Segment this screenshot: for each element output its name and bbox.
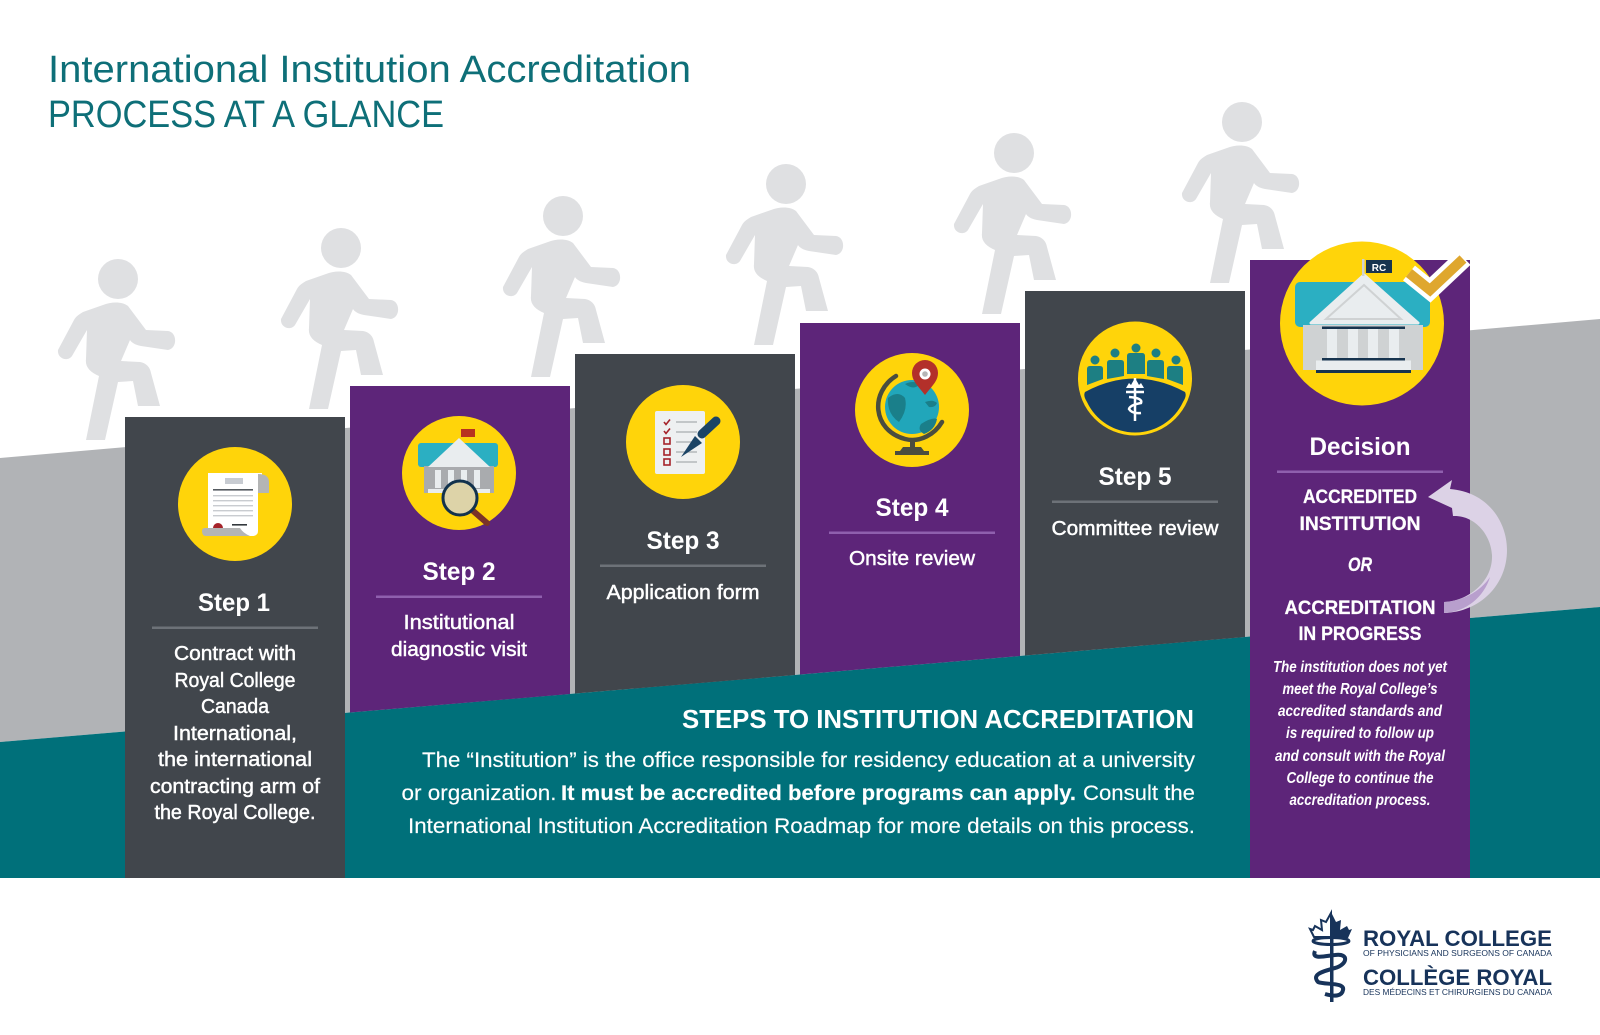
icon: committee with caduceus (1078, 322, 1192, 436)
text: step 1 description: International, (173, 723, 297, 745)
icon: accredited institution building with check mark: RC (1372, 263, 1386, 274)
person 3 (503, 196, 620, 377)
text: accreditation in progress note: accreditation process. (1290, 792, 1430, 809)
heading: decision: Decision (1310, 433, 1410, 461)
text: step 2 description (391, 612, 527, 661)
text: decision outcomes: OR (1348, 555, 1372, 576)
logo: Royal College: OF PHYSICIANS AND SURGEONS OF CANADA (1363, 949, 1553, 958)
arrow: in progress back to accredited (1428, 480, 1507, 613)
text: explanation paragraph: or organization. (402, 781, 556, 805)
icon: checklist and pen (626, 385, 740, 499)
person 1 (58, 259, 175, 440)
heading: step 3: Step 3 (646, 527, 720, 555)
title (48, 49, 691, 136)
text: explanation paragraph: It must be accredited before programs can apply. (561, 781, 1076, 805)
panel: step 4 (800, 323, 1020, 674)
text: decision outcomes: IN PROGRESS (1298, 624, 1422, 645)
panel: step 2 (350, 386, 570, 712)
heading: step 4: Step 4 (876, 494, 949, 522)
text: decision outcomes: ACCREDITED (1303, 487, 1417, 508)
person 2 (281, 228, 398, 409)
person 4 (726, 164, 843, 345)
text: accreditation in progress note: is required to follow up (1286, 725, 1434, 742)
text: step 1 description: the Royal College. (154, 802, 316, 824)
text: explanation paragraph: Consult the (1083, 781, 1195, 805)
title: PROCESS AT A GLANCE (48, 94, 444, 136)
logo: Royal College: COLLÈGE ROYAL (1363, 965, 1552, 990)
text: decision outcomes (1284, 487, 1436, 645)
background band: teal slope (0, 607, 1600, 878)
walking people climbing the steps (58, 102, 1299, 440)
person 5 (954, 133, 1071, 314)
text: accreditation in progress note: meet the Royal College’s (1282, 681, 1438, 698)
panel: step 3 (575, 354, 795, 694)
text: step 5 description: Committee review (1052, 518, 1219, 540)
icon: accredited institution building with check mark (1280, 242, 1464, 406)
heading: step 2: Step 2 (422, 558, 496, 586)
icon: contract scroll (178, 447, 292, 561)
text: step 2 description: diagnostic visit (391, 639, 527, 661)
text: explanation paragraph: International Institution Accreditation Roadmap for more details on this process. (408, 814, 1195, 838)
text: step 1 description: contracting arm of (150, 776, 320, 798)
text: step 1 description: Contract with (174, 643, 296, 665)
text: step 2 description: Institutional (404, 612, 514, 634)
logo: Royal College: DES MÉDECINS ET CHIRURGIENS DU CANADA (1363, 988, 1553, 997)
text: decision outcomes: ACCREDITATION (1284, 598, 1436, 619)
title: International Institution Accreditation (48, 49, 691, 91)
panel: step 1 (125, 417, 345, 878)
heading: step 5: Step 5 (1098, 463, 1172, 491)
logo: Royal College: ROYAL COLLEGE (1363, 926, 1552, 951)
text: step 1 description: the international (158, 749, 312, 771)
text: step 3 description: Application form (606, 582, 760, 604)
text: explanation paragraph: The “Institution” is the office responsible for residency education at a university (422, 748, 1195, 772)
text: accreditation in progress note: and consult with the Royal (1275, 748, 1445, 765)
text: step 1 description (150, 643, 320, 824)
text: accreditation in progress note: The institution does not yet (1273, 659, 1448, 676)
panel: decision (1250, 242, 1470, 878)
text: step 1 description: Canada (201, 696, 270, 718)
panel: step 5 (1025, 291, 1245, 656)
icon: globe with location pin (855, 353, 969, 467)
text: step 4 description: Onsite review (849, 548, 976, 570)
icon: maple leaf and rod of Asclepius (1310, 912, 1352, 1002)
icon: building under magnifying glass (402, 416, 516, 530)
text: step 1 description: Royal College (174, 670, 296, 692)
heading: step 1: Step 1 (198, 589, 270, 617)
text: accreditation in progress note (1273, 659, 1448, 809)
text: decision outcomes: INSTITUTION (1300, 514, 1420, 535)
person 6 (1182, 102, 1299, 283)
background band: grey slope (0, 319, 1600, 742)
text: explanation paragraph (402, 748, 1195, 838)
heading: steps to institution accreditation: STEPS TO INSTITUTION ACCREDITATION (682, 704, 1194, 734)
text: accreditation in progress note: accredited standards and (1278, 703, 1443, 720)
logo: Royal College (1310, 912, 1553, 1002)
text: accreditation in progress note: College to continue the (1286, 770, 1434, 787)
